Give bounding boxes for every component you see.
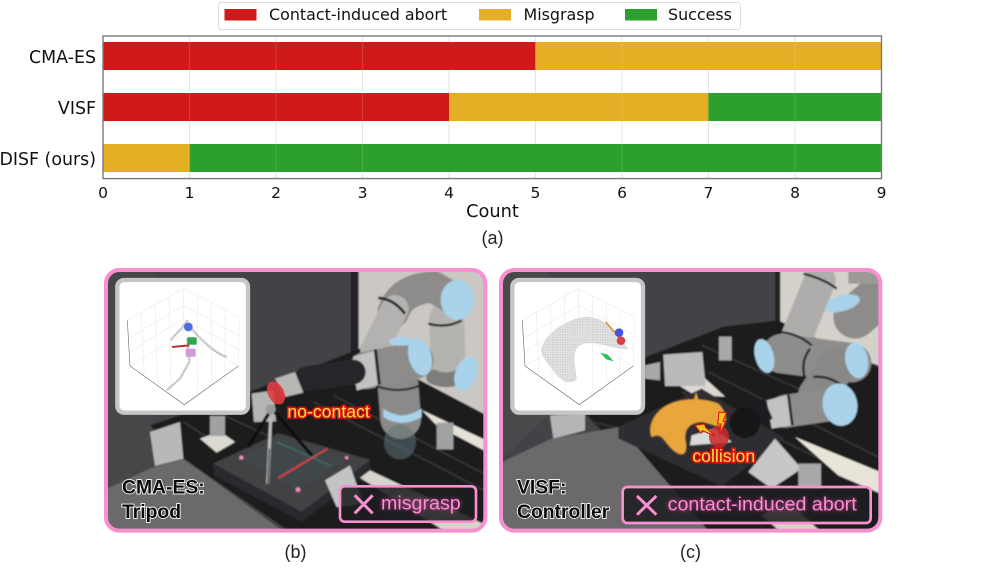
result badge: contact-induced abort: contact-induced abort	[668, 493, 857, 515]
no-contact zone	[266, 382, 286, 404]
rails	[585, 320, 888, 539]
photo scene	[503, 272, 878, 529]
result badge: misgrasp	[340, 486, 476, 522]
result badge: contact-induced abort	[623, 487, 871, 523]
legend: misgrasp	[479, 5, 595, 24]
tripod	[248, 409, 312, 456]
legend	[218, 2, 740, 30]
inset: 3D point cloud plot	[117, 280, 248, 413]
foam plate	[618, 389, 785, 486]
caption (c): (c)	[680, 542, 701, 562]
robot arm	[447, 319, 448, 369]
x axis tick labels: 6	[617, 184, 627, 202]
y axis labels: DISF (ours)	[0, 150, 96, 170]
label: CMA-ES Tripod: Tripod	[122, 502, 181, 523]
result badge: contact-induced abort: contact-induced abort	[668, 493, 857, 515]
y axis labels: VISF	[58, 99, 96, 119]
x axis tick labels: 7	[703, 184, 713, 202]
result badge: misgrasp: misgrasp	[381, 492, 461, 514]
y axis labels: CMA-ES	[29, 48, 96, 68]
x axis tick labels: 2	[271, 184, 281, 202]
game controller	[650, 399, 726, 454]
caption (b): (b)	[284, 542, 306, 562]
label: VISF Controller: VISF:	[517, 478, 566, 499]
label: no-contact: no-contact	[287, 401, 370, 421]
x axis tick labels: 8	[790, 184, 800, 202]
label: VISF Controller	[517, 478, 610, 523]
bar chart	[0, 36, 886, 222]
panel: VISF controller photo	[495, 262, 895, 539]
label: CMA-ES Tripod	[122, 478, 205, 523]
bar: CMA-ES	[103, 42, 882, 70]
label: CMA-ES Tripod: CMA-ES:	[122, 478, 205, 499]
legend: success	[625, 5, 732, 24]
result badge: misgrasp: misgrasp	[381, 492, 461, 514]
y axis labels	[0, 48, 96, 170]
label: VISF Controller: Controller	[517, 502, 610, 523]
bar: DISF (ours)	[103, 144, 882, 172]
chart gridlines	[190, 36, 795, 178]
x axis tick labels	[98, 184, 886, 202]
foam plate	[213, 433, 370, 522]
panel: CMA-ES tripod photo	[100, 262, 493, 539]
x axis tick labels: 3	[358, 184, 367, 202]
collision zone	[709, 425, 729, 448]
chart axes frame	[103, 36, 882, 179]
icon: collision bolts	[695, 412, 727, 436]
legend: misgrasp: Misgrasp	[524, 5, 595, 24]
rails	[150, 349, 493, 539]
inset: 3D point cloud plot	[512, 280, 643, 413]
photo scene	[108, 272, 484, 529]
legend: success: Success	[668, 5, 732, 24]
robot arm	[855, 282, 895, 317]
x axis tick labels: 5	[530, 184, 540, 202]
x axis tick labels: 4	[444, 184, 454, 202]
x axis tick labels: 9	[877, 184, 886, 202]
label: collision: collision	[692, 446, 755, 466]
photo border	[501, 270, 880, 531]
photo border	[106, 270, 485, 531]
x axis title: Count	[466, 201, 519, 222]
x axis tick labels: 0	[98, 184, 108, 202]
caption (a): (a)	[482, 228, 504, 248]
legend: contact-induced abort: Contact-induced abort	[269, 5, 447, 24]
bar: VISF	[103, 93, 882, 121]
red target axis marks	[278, 449, 327, 478]
x axis tick labels: 1	[185, 184, 194, 202]
